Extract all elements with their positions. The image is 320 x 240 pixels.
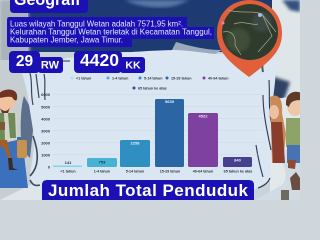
legend: 40-64 tahun bbox=[208, 76, 229, 80]
x axis labels: 65 tahun ke atas bbox=[224, 170, 252, 174]
chart axis labels: 0 bbox=[48, 164, 51, 170]
legend: 15-29 tahun bbox=[171, 76, 192, 80]
chart axis labels: 2000 bbox=[41, 140, 51, 146]
x axis labels bbox=[60, 170, 252, 174]
chart axis labels: 4000 bbox=[41, 116, 51, 122]
bar: under 1 year bbox=[53, 160, 82, 167]
stat: 29 RW: RW bbox=[41, 60, 60, 72]
bar: 65+ years bbox=[223, 157, 252, 167]
background map bbox=[0, 0, 300, 200]
x axis labels: 40-64 tahun bbox=[193, 170, 214, 174]
right characters bbox=[269, 92, 304, 169]
x axis labels: 1-4 tahun bbox=[94, 170, 111, 174]
infographic scene bbox=[0, 0, 300, 200]
description block: Luas wilayah Tanggul Wetan adalah 7571,95 km². bbox=[10, 20, 183, 28]
legend bbox=[70, 76, 229, 90]
description block: Kabupaten Jember, Jawa Timur. bbox=[10, 36, 123, 44]
bar: 15-29 years bbox=[155, 99, 184, 167]
bar: 40-64 years: 4522 bbox=[199, 114, 208, 118]
chart axis labels bbox=[41, 92, 51, 170]
chart axis labels: 3000 bbox=[41, 128, 51, 134]
legend: <1 tahun bbox=[76, 76, 92, 80]
stat: 4420 KK: 4420 bbox=[80, 50, 119, 70]
decorative brown props bbox=[281, 172, 300, 200]
x axis labels: 15-29 tahun bbox=[160, 170, 181, 174]
bar chart bbox=[53, 99, 252, 167]
x axis labels: 5-14 tahun bbox=[126, 170, 145, 174]
x axis labels: <1 tahun bbox=[60, 170, 76, 174]
bar: 15-29 years: 5639 bbox=[165, 99, 175, 104]
stat: 29 RW bbox=[9, 51, 63, 73]
legend: 5-14 tahun bbox=[144, 76, 163, 80]
connector bbox=[62, 60, 70, 62]
bar: 40-64 years bbox=[188, 113, 218, 167]
heading: Geografi bbox=[10, 0, 88, 13]
stat: 29 RW: 29 bbox=[16, 53, 33, 70]
chart axis labels: 5000 bbox=[41, 104, 51, 110]
bar: under 1 year: 141 bbox=[65, 160, 72, 165]
legend: 1-4 tahun bbox=[112, 76, 129, 80]
bar: 65+ years: 840 bbox=[234, 158, 242, 162]
left character: man with hat and basket bbox=[0, 89, 33, 188]
bar: 1-4 years: 753 bbox=[99, 160, 106, 164]
legend: 65 tahun ke atas bbox=[138, 86, 167, 90]
chart axis labels: 6000 bbox=[41, 92, 51, 97]
bar: 5-14 years: 2258 bbox=[131, 140, 140, 146]
bar: 5-14 years bbox=[120, 140, 150, 167]
bar: 1-4 years bbox=[87, 158, 117, 167]
stat: 4420 KK bbox=[74, 50, 145, 73]
stat: 4420 KK: KK bbox=[125, 60, 141, 72]
chart gridlines bbox=[53, 94, 262, 154]
description block bbox=[7, 17, 214, 47]
footer title: Jumlah Total Penduduk bbox=[48, 181, 249, 200]
paper panel bbox=[20, 50, 276, 200]
chart axis labels: 1000 bbox=[41, 152, 51, 158]
description block: Kelurahan Tanggul Wetan terletak di Kecamatan Tanggul, bbox=[10, 28, 212, 36]
location pin with map bbox=[217, 0, 282, 77]
